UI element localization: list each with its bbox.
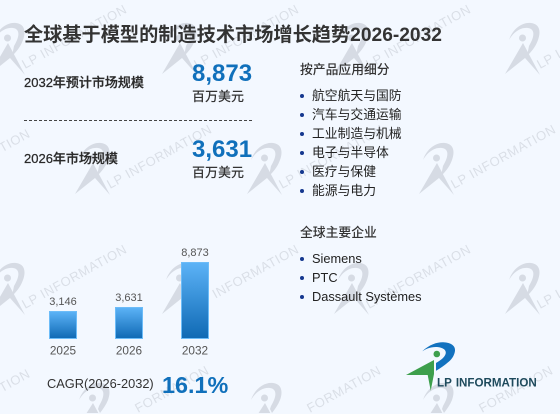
bar 2026: 2026 (116, 344, 143, 358)
title: 全球基于模型的制造技术市场增长趋势2026-2032 (24, 25, 442, 46)
label: 2026 market: 2026年市场规模 (24, 151, 118, 166)
text: LP INFORMATION (191, 241, 301, 312)
unit: 百万美元 (192, 165, 244, 180)
list item: 工业制造与机械 (312, 126, 402, 141)
label: 2032 forecast: 2032年预计市场规模 (24, 75, 144, 90)
list item: PTC (312, 270, 338, 285)
stat: 2026 market size (24, 136, 252, 180)
bar 2026 (115, 292, 143, 358)
text: LP INFORMATION (191, 1, 301, 72)
bar chart (49, 247, 209, 358)
logo arrow (406, 360, 434, 391)
heading: companies: 全球主要企业 (300, 225, 377, 240)
text: LP INFORMATION (363, 1, 473, 72)
heading: segments: 按产品应用细分 (300, 62, 390, 77)
unit: 百万美元 (192, 89, 244, 104)
bar 2025: 3,146 (49, 296, 77, 308)
value: 3,631: 3,631 (192, 136, 252, 163)
list item: 电子与半导体 (312, 145, 389, 160)
list item: Siemens (312, 251, 362, 266)
list item: Dassault Systèmes (312, 289, 422, 304)
text: LP INFORMATION (19, 1, 129, 72)
list item: 医疗与保健 (312, 164, 376, 179)
panel: segments by product application (300, 62, 402, 198)
CAGR label: CAGR(2026-2032) (47, 376, 154, 391)
stat: 2032 market size (24, 60, 252, 104)
logo arc (422, 342, 455, 371)
logo text: LP INFORMATION (437, 376, 537, 390)
bar 2025: 2025 (50, 344, 77, 358)
list item: 航空航天与国防 (312, 88, 402, 103)
bar 2032: 2032 (182, 344, 208, 358)
panel: key companies (300, 225, 422, 304)
logo: LP Information (406, 342, 537, 390)
divider (24, 120, 252, 121)
text: LP INFORMATION (104, 121, 214, 192)
logo dot (434, 351, 440, 357)
bar 2032 (181, 247, 209, 358)
list item: 能源与电力 (312, 183, 376, 198)
bar 2026: 3,631 (115, 292, 143, 304)
CAGR value: 16.1% (162, 372, 228, 398)
text: LP INFORMATION (363, 241, 473, 312)
text: LP INFORMATION (448, 121, 558, 192)
text: LP INFORMATION (276, 121, 386, 192)
list item: 汽车与交通运输 (312, 107, 402, 122)
bar 2025 (49, 296, 77, 358)
bar 2032: 8,873 (181, 247, 209, 259)
value: 8,873: 8,873 (192, 60, 252, 87)
text: LP INFORMATION (19, 241, 129, 312)
